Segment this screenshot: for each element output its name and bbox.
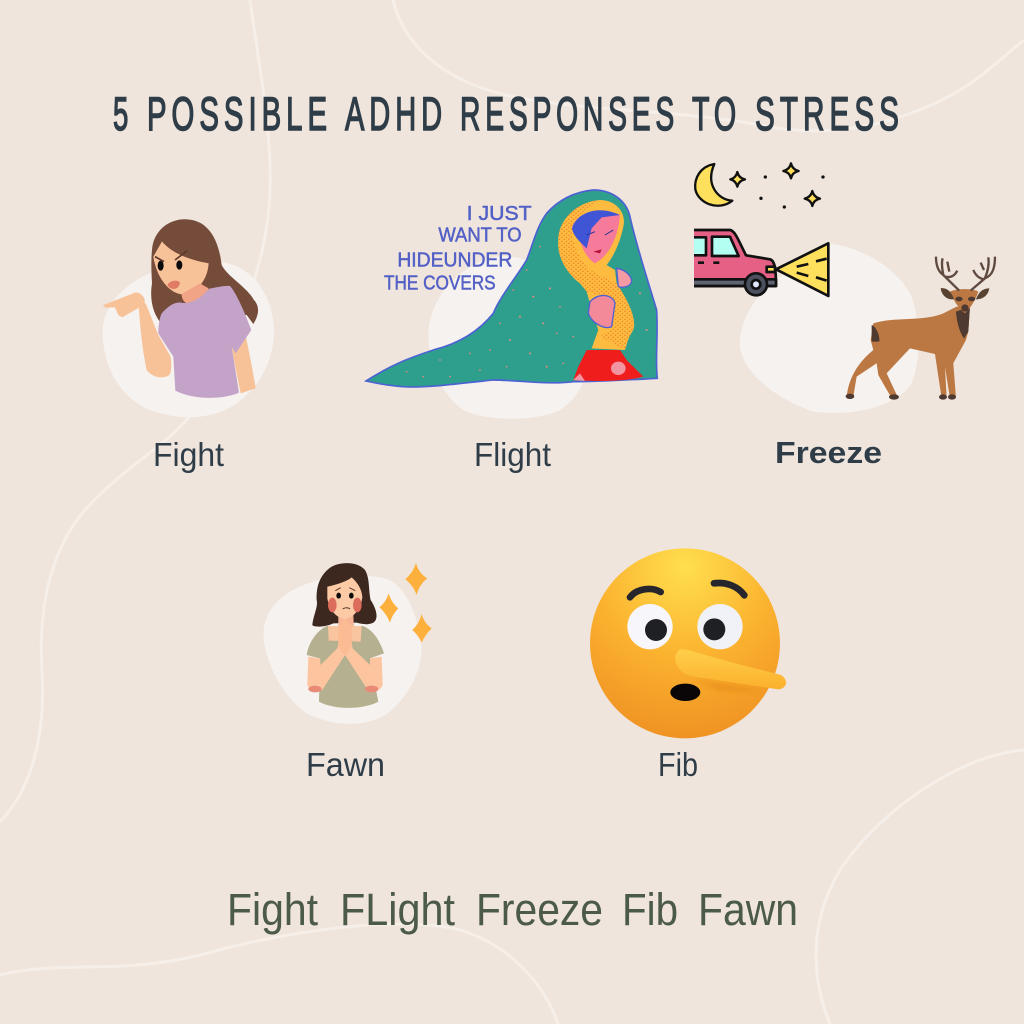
title [113,87,904,140]
title: STRESS [755,87,904,140]
icon: pleading woman with sparkles [263,563,432,724]
handwritten words: WANT TO [438,223,522,246]
panel: freeze [690,163,995,470]
footer text [227,884,798,935]
label: flight: Flight [474,436,551,473]
icon: car with headlight beam [690,230,828,296]
handwritten words: HIDEUNDER [397,249,512,272]
title: 5 [113,87,133,140]
footer text: FLight [340,884,455,935]
icon: deer [846,257,995,400]
label: fawn: Fawn [306,746,385,783]
handwritten words: I JUST [467,202,532,225]
panel: fawn [263,563,432,783]
icon: person under blanket [366,190,657,419]
label: fib: Fib [658,746,698,783]
title: POSSIBLE [147,87,332,140]
title: ADHD [345,87,447,140]
title: RESPONSES [460,87,679,140]
handwritten words: THE COVERS [384,271,496,294]
label: fight: Fight [153,436,224,473]
icon: moon and stars [695,163,820,206]
footer text: Fawn [698,884,798,935]
handwritten words [384,202,532,294]
title: TO [692,87,741,140]
icon: lying face emoji [590,548,786,738]
icon: angry woman pointing [103,219,274,417]
label: freeze: Freeze [775,435,882,470]
footer text: Fight [227,884,318,935]
footer text: Freeze [476,884,603,935]
panel: fib [590,548,786,783]
panel: fight [103,219,274,473]
panel: flight [366,190,657,473]
footer text: Fib [622,884,678,935]
